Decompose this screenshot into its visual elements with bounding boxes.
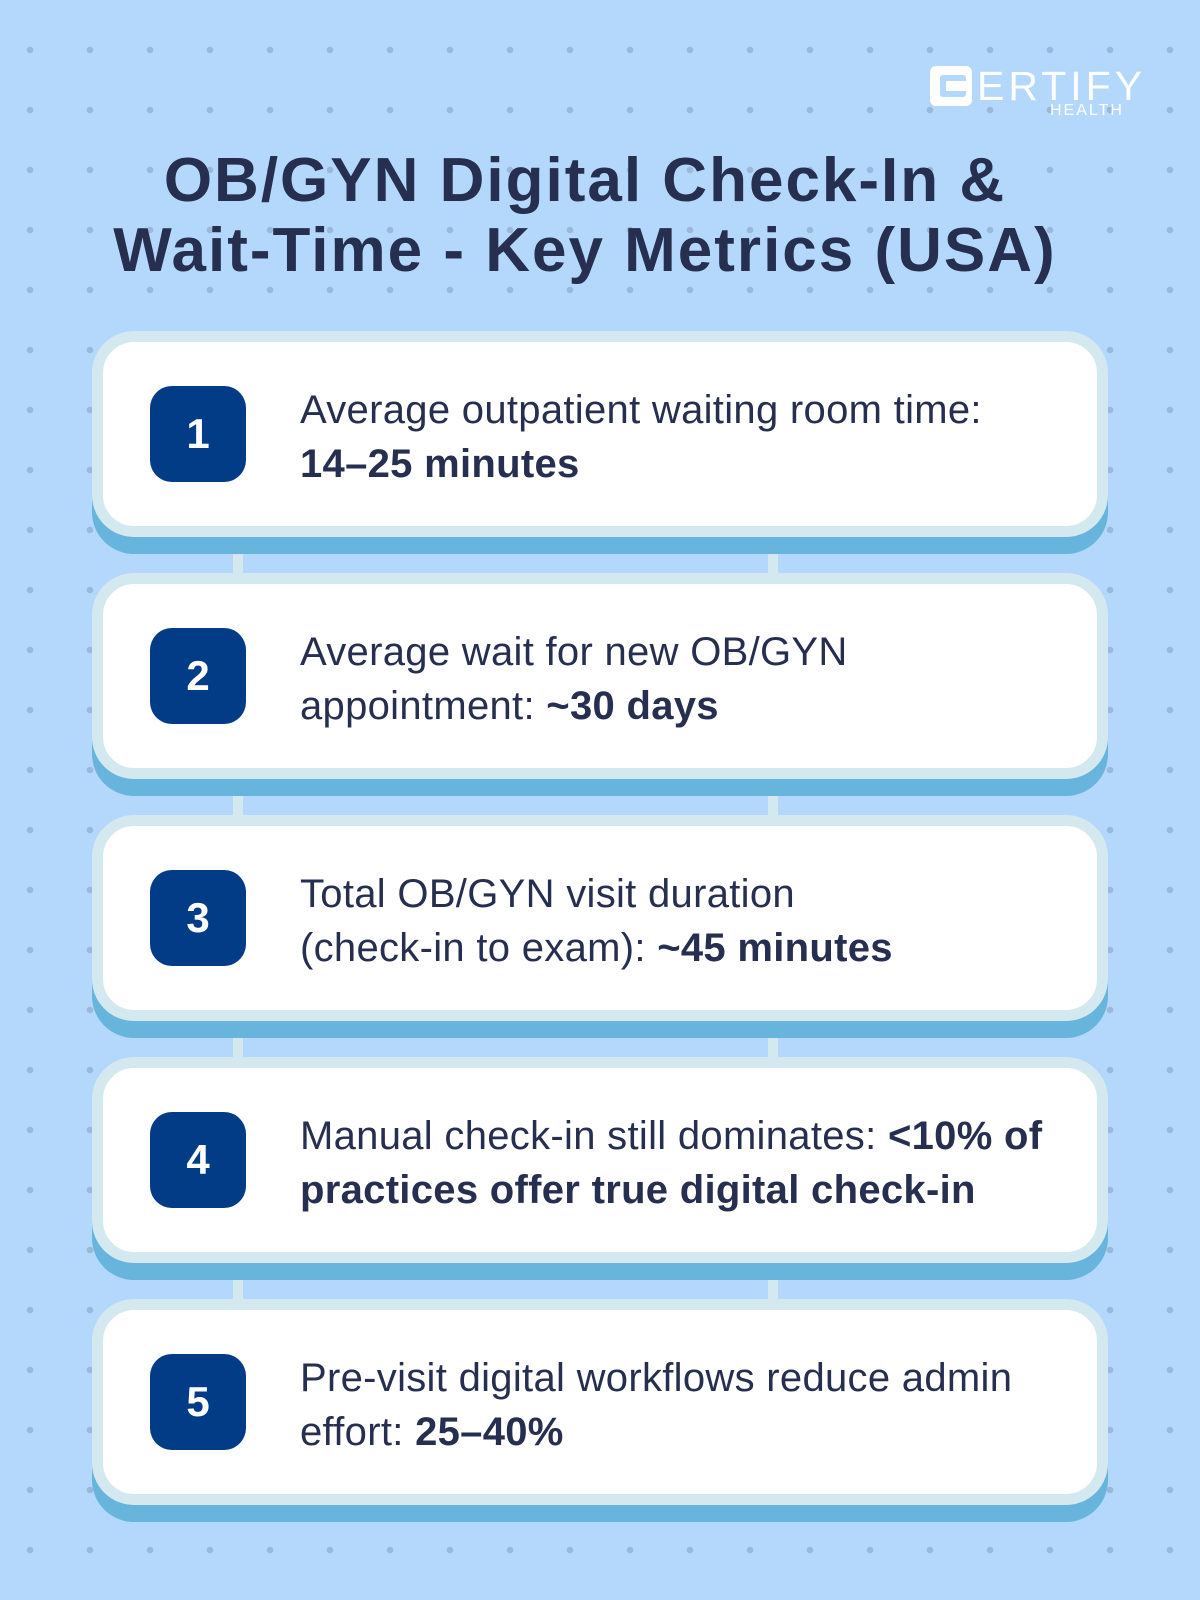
card 2: appointment: ~30 days (300, 684, 719, 728)
card 3: 3 (186, 894, 210, 941)
card 2 (92, 573, 1108, 779)
card 2: Average wait for new OB/GYN (300, 630, 848, 674)
card 2: 2 (186, 652, 210, 699)
card 1: Average outpatient waiting room time: (300, 388, 982, 432)
card 5 (92, 1299, 1108, 1505)
connectors (92, 344, 1106, 1522)
logo: HEALTH (1050, 102, 1124, 119)
card 1 (92, 331, 1108, 537)
card 4: practices offer true digital check-in (300, 1168, 976, 1212)
card 4: Manual check-in still dominates: <10% of (300, 1114, 1042, 1158)
card 4 (92, 1057, 1108, 1263)
title: Wait-Time - Key Metrics (USA) (113, 216, 1057, 285)
card 5: effort: 25–40% (300, 1410, 564, 1454)
card 3 (92, 815, 1108, 1021)
card 3: (check-in to exam): ~45 minutes (300, 926, 893, 970)
card 1: 14–25 minutes (300, 442, 580, 486)
card 5: 5 (186, 1378, 210, 1425)
card 3: Total OB/GYN visit duration (300, 872, 795, 916)
title (113, 146, 1057, 285)
logo (930, 63, 1146, 119)
title: OB/GYN Digital Check-In & (164, 146, 1006, 215)
card 1: 1 (186, 410, 210, 457)
card 5: Pre-visit digital workflows reduce admin (300, 1356, 1012, 1400)
card 4: 4 (186, 1136, 210, 1183)
logo: ERTIFY (977, 63, 1146, 109)
